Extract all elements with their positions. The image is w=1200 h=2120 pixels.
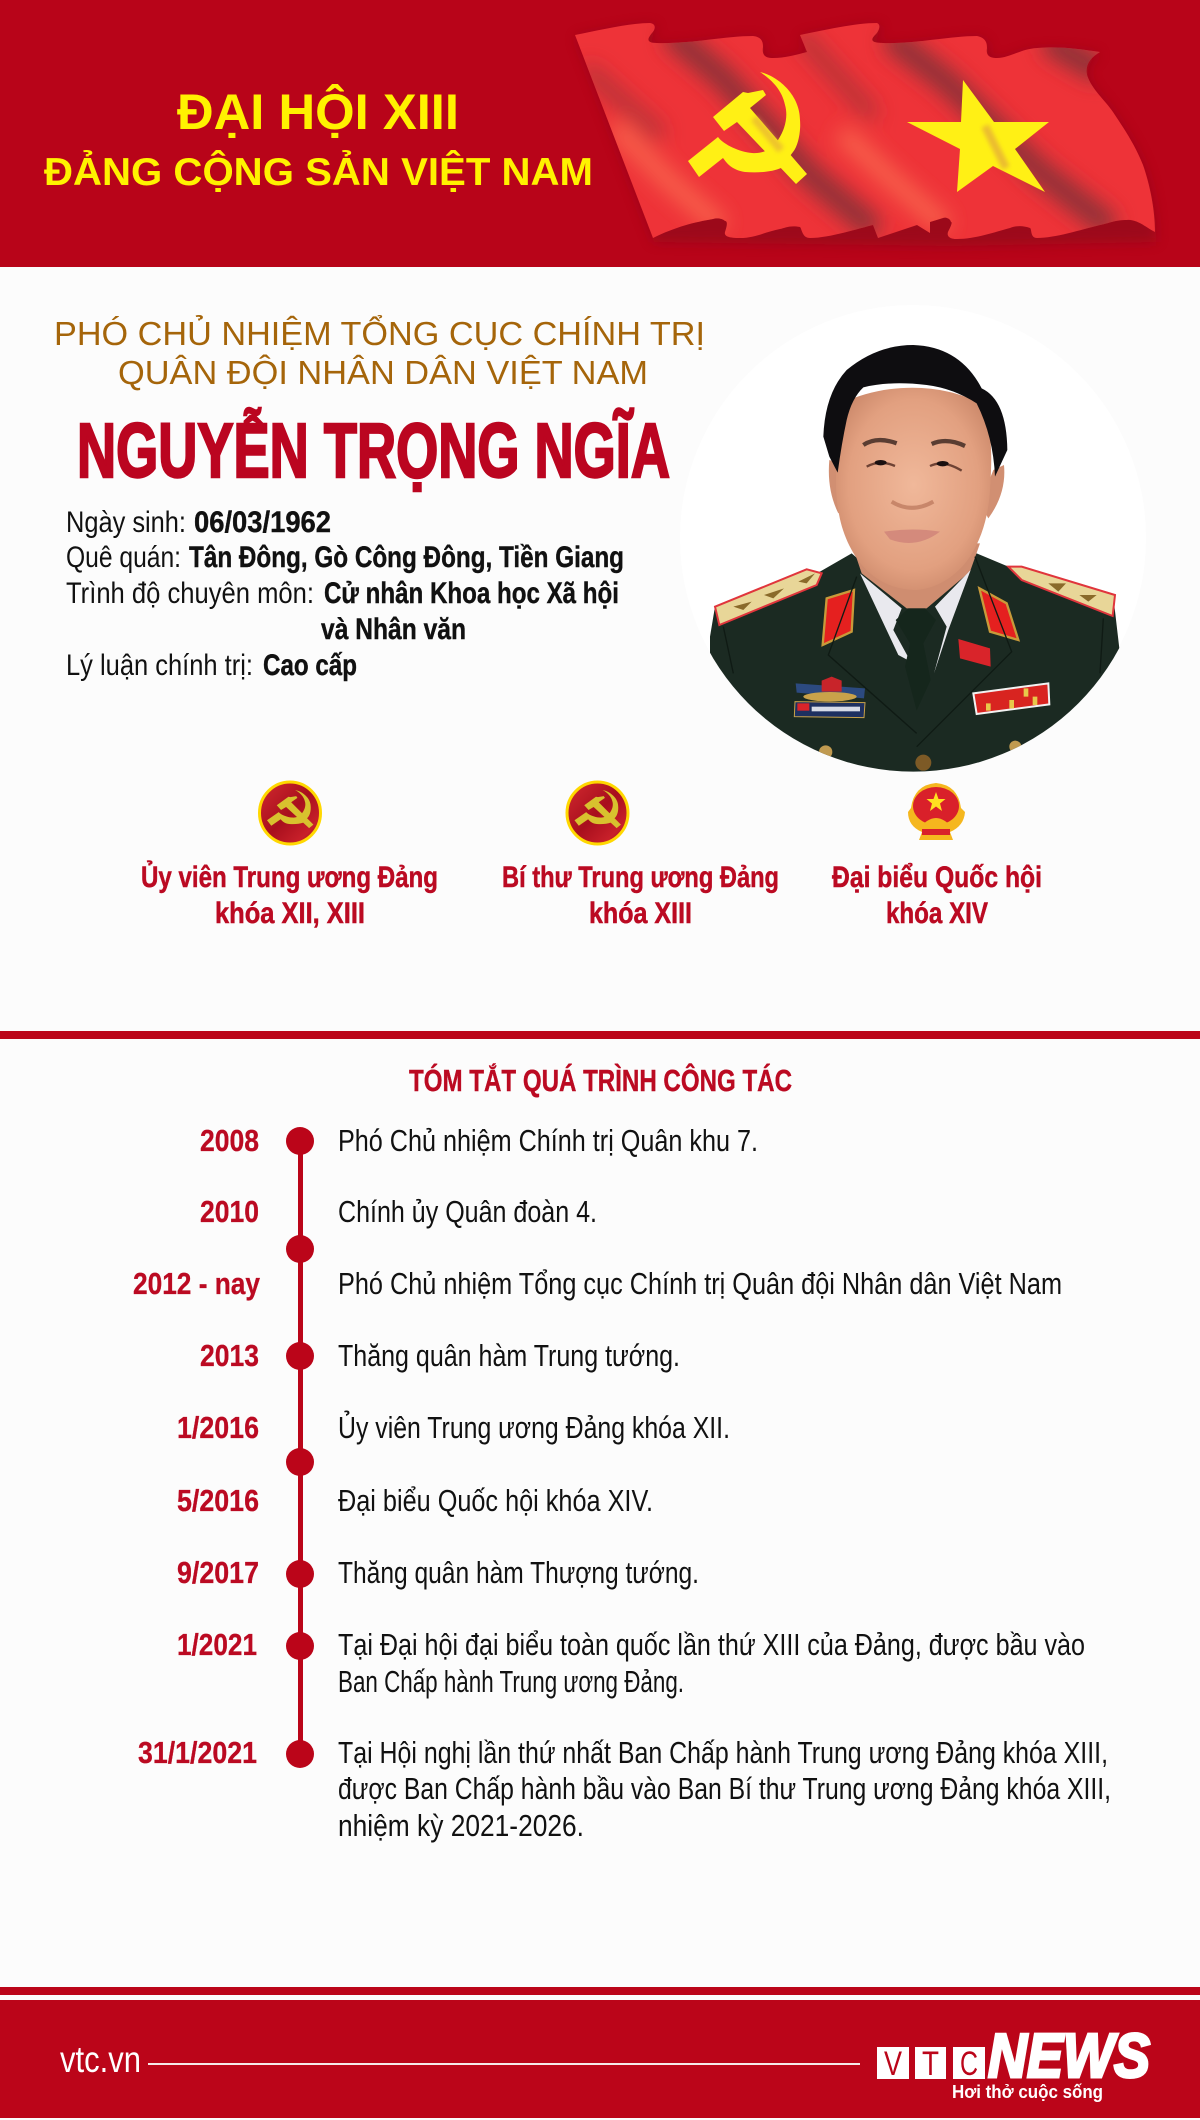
logo: VTC News: V [884,2045,902,2083]
timeline [133,1123,1111,1843]
title [44,83,593,194]
logo: VTC News: NEWS [988,2022,1150,2091]
entry 31/1/2021: nhiệm kỳ 2021-2026. [338,1808,584,1843]
entry 2012: Phó Chủ nhiệm Tổng cục Chính trị Quân đội Nhân dân Việt Nam [338,1266,1062,1301]
buttons [819,741,1021,771]
text block: personal details [66,506,624,682]
lapel lines [723,557,1103,747]
entry 2010: Chính ủy Quân đoàn 4. [338,1194,597,1229]
name heading: NGUYỄN TRỌNG NGĨA [77,407,670,494]
left epaulette [715,569,822,625]
collar [860,570,971,673]
ears [829,460,1004,518]
website: vtc.vn [60,2039,141,2080]
icon: party emblem [260,782,320,844]
neck [852,543,980,608]
entry 2008: 2008 [200,1123,259,1158]
entry 9/2017: Thăng quân hàm Thượng tướng. [338,1555,699,1590]
entry 1/2021 [177,1627,1085,1699]
header banner [0,0,1200,267]
divider [0,1031,1200,1039]
text block: personal details: Lý luận chính trị: [66,649,253,682]
role: party central committee member [141,782,438,930]
mouth [884,529,940,543]
name plate [794,702,865,718]
subtitle: position [54,315,705,391]
text block: personal details: Cử nhân Khoa học Xã hội [324,577,619,610]
text block: personal details: Cao cấp [263,649,357,682]
role: national assembly deputy [832,783,1042,930]
entry 1/2016: Ủy viên Trung ương Đảng khóa XII. [338,1409,730,1445]
entry 2008: Phó Chủ nhiệm Chính trị Quân khu 7. [338,1123,758,1158]
entry 1/2016 [177,1409,730,1445]
logo: VTC News [877,2022,1150,2102]
text block: personal details: và Nhân văn [321,613,466,646]
entry 2010 [200,1194,597,1229]
entry 31/1/2021 [138,1735,1111,1843]
text block: personal details: Quê quán: [66,541,181,574]
face [836,388,991,590]
icon: yellow star [907,80,1049,192]
footer [0,1987,1200,2118]
entry 1/2021: 1/2021 [177,1627,257,1662]
label [832,861,1042,930]
entry 2013: Thăng quân hàm Trung tướng. [338,1338,680,1373]
label [141,860,438,930]
text block: personal details: Tân Đông, Gò Công Đông, Tiền Giang [189,541,624,574]
entry 2013 [200,1338,680,1373]
eyebrows [863,440,965,446]
logo: VTC News: T [922,2045,939,2083]
right epaulette [1008,567,1115,616]
stars on epaulettes [733,573,1097,610]
subtitle: position: PHÓ CHỦ NHIỆM TỔNG CỤC CHÍNH TRỊ [54,315,705,352]
label: Đại biểu Quốc hội [832,861,1042,894]
panel: portrait photo [710,345,1120,772]
label [502,861,779,930]
logo: VTC News: Hơi thở cuộc sống [952,2082,1103,2102]
entry 9/2017 [177,1555,699,1590]
heading: career summary: TÓM TẮT QUÁ TRÌNH CÔNG TÁC [409,1062,792,1098]
label: khóa XII, XIII [215,897,365,930]
entry 5/2016: 5/2016 [177,1483,259,1518]
flag: party and national flags [575,23,1156,246]
icon: party emblem [567,782,628,844]
entry 5/2016 [177,1483,653,1518]
text block: personal details: Ngày sinh: [66,506,186,539]
label: khóa XIV [886,897,988,930]
entry 31/1/2021: 31/1/2021 [138,1735,257,1770]
text block: personal details: 06/03/1962 [194,506,331,539]
collar tab left [823,590,854,645]
eyes [867,463,962,471]
text block: personal details: Trình độ chuyên môn: [66,577,314,610]
flag pin [958,639,991,667]
entry 2013: 2013 [200,1338,259,1373]
entry 1/2016: 1/2016 [177,1410,259,1445]
ribbon bar [973,683,1049,714]
title: ĐẢNG CỘNG SẢN VIỆT NAM [44,149,593,194]
subtitle: position: QUÂN ĐỘI NHÂN DÂN VIỆT NAM [118,354,648,391]
label: Ủy viên Trung ương Đảng [141,860,438,894]
role: party secretariat [502,782,779,930]
logo: VTC News: C [960,2045,978,2083]
insignia badge [796,677,865,701]
uniform jacket [710,553,1119,773]
entry 2012 [133,1266,1062,1301]
entry 1/2021: Ban Chấp hành Trung ương Đảng. [338,1664,684,1699]
title: ĐẠI HỘI XIII [177,83,459,140]
entry 2010: 2010 [200,1194,259,1229]
entry 9/2017: 9/2017 [177,1555,259,1590]
entry 5/2016: Đại biểu Quốc hội khóa XIV. [338,1483,653,1518]
entry 2012: 2012 - nay [133,1266,261,1301]
icon: hammer and sickle [688,72,807,184]
label: khóa XIII [589,897,692,930]
timeline axis [286,1127,314,1768]
icon: national emblem [908,783,965,840]
entry 2008 [200,1123,758,1158]
hair [823,345,1007,477]
nose [892,502,933,508]
label: Bí thư Trung ương Đảng [502,861,779,894]
tie [896,608,925,662]
collar tab right [979,588,1018,640]
